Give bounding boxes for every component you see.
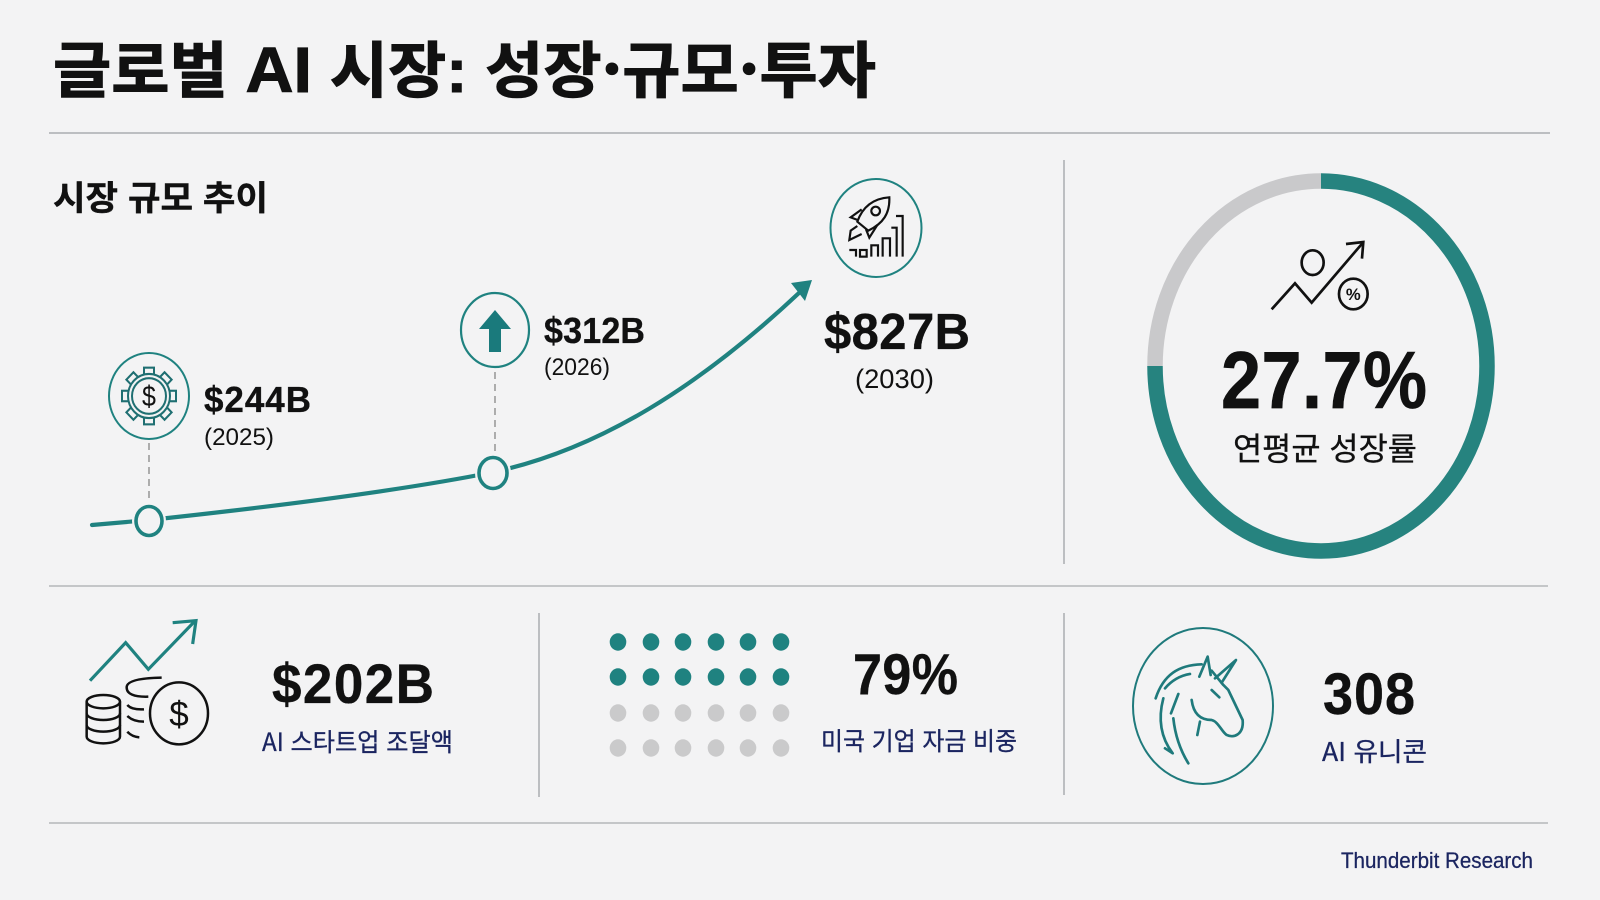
label: US share: 미국 기업 자금 비중 <box>821 722 1017 758</box>
icon: up arrow <box>461 293 529 367</box>
value: $312B: $312B <box>544 311 645 351</box>
label: startup funding: AI 스타트업 조달액 <box>262 723 453 759</box>
data point ring 2025 <box>136 506 162 536</box>
year: 2025: (2025) <box>204 424 274 451</box>
arrowhead <box>791 280 812 301</box>
section heading: 시장 규모 추이 <box>53 171 268 220</box>
value: 79%: 79% <box>853 643 958 707</box>
value: $244B: $244B <box>204 379 311 420</box>
source credit: Thunderbit Research <box>1341 848 1533 873</box>
value: 308: 308 <box>1323 661 1415 726</box>
panel: US share <box>610 633 1017 758</box>
dot matrix chart <box>610 633 789 757</box>
icon: growth with percent <box>1272 242 1368 309</box>
data point 2025 <box>136 506 162 536</box>
value: $827B: $827B <box>824 303 970 360</box>
growth curve line chart <box>92 292 800 525</box>
dashed connector 2026 <box>494 372 496 454</box>
title: 글로벌 AI 시장: 성장·규모·투자 <box>53 21 876 110</box>
label: AI unicorns: AI 유니콘 <box>1322 732 1427 769</box>
value: $202B: $202B <box>272 653 434 715</box>
data point ring 2026 <box>479 458 507 488</box>
icon: rocket with bars <box>830 179 922 277</box>
ring grey remainder <box>1155 181 1321 366</box>
label: CAGR: 연평균 성장률 <box>1233 424 1417 470</box>
data point 2026 <box>479 458 507 488</box>
icon: growth with percent: % <box>1346 285 1361 304</box>
panel: unicorns <box>1133 628 1427 784</box>
dashed connector 2025 <box>148 443 150 503</box>
icon: coins and rising arrow: $ <box>169 695 189 734</box>
icon: coins and rising arrow <box>87 621 208 744</box>
year: 2030: (2030) <box>855 364 934 394</box>
icon: gear with dollar: $ <box>142 380 156 412</box>
panel: market size trend <box>53 171 970 536</box>
panel: CAGR ring <box>1155 181 1487 551</box>
panel: startup funding <box>87 621 453 759</box>
year: 2026: (2026) <box>544 354 610 381</box>
icon: gear with dollar <box>109 353 189 439</box>
icon: unicorn <box>1133 628 1273 784</box>
ring teal progress <box>1155 181 1487 551</box>
value: 27.7%: 27.7% <box>1221 336 1427 426</box>
